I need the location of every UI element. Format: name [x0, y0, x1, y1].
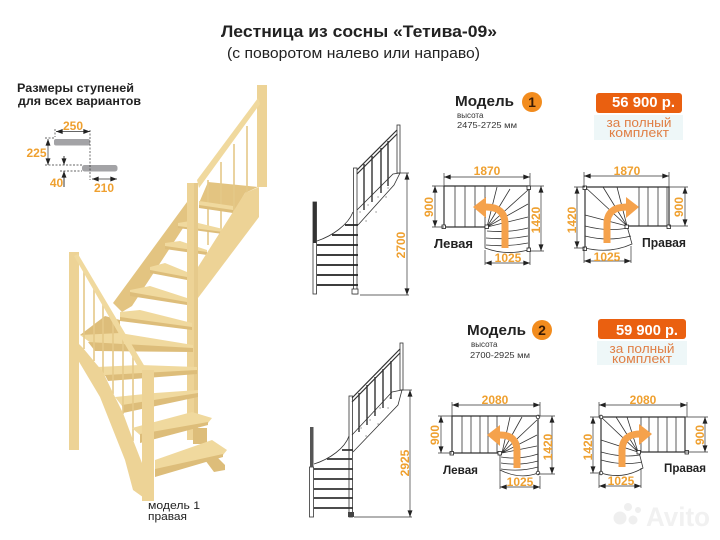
plan: model 1 left: 1420	[529, 206, 543, 233]
plan: model 1 right: 900	[672, 197, 686, 217]
watermark: Avito	[614, 502, 710, 532]
price: model 1: 56 900 р.	[612, 94, 675, 111]
label: Левая	[434, 237, 473, 251]
heading: model 2: Модель	[467, 322, 526, 339]
height note: model 1: высота	[457, 111, 484, 120]
middle post	[187, 183, 198, 440]
upper back wedge	[199, 182, 258, 213]
label: Левая	[443, 463, 478, 477]
diagram: step dimensions: 225	[26, 146, 47, 160]
heading: model 1: Модель	[455, 93, 514, 110]
illustration: wooden staircase	[69, 85, 267, 501]
upper stringer	[198, 187, 259, 298]
caption: model 1 right: правая	[148, 511, 187, 523]
title: Лестница из сосны «Тетива-09»	[221, 22, 497, 41]
side elevation: model 1	[313, 125, 409, 295]
plan: model 2 left	[428, 393, 555, 489]
plan: model 2 right	[581, 393, 708, 488]
plan: model 2 right: 1420	[581, 433, 595, 460]
plan: model 1 right: 1420	[565, 206, 579, 233]
plan: model 1 left: 1025	[495, 251, 522, 265]
heading: step sizes	[17, 81, 141, 108]
plan: model 2 right: 900	[693, 425, 707, 445]
plan: model 1 right: 1025	[594, 250, 621, 264]
arrow	[473, 197, 505, 248]
caption: model 1 right: модель 1	[148, 500, 200, 512]
plan: model 1 left: 900	[422, 197, 436, 217]
back beam	[113, 202, 187, 312]
side elevation: model 1: 2700	[394, 231, 408, 258]
title: (с поворотом налево или направо)	[227, 45, 480, 62]
upper post	[257, 85, 267, 187]
bottom treads	[132, 412, 212, 435]
plan: model 2 right: 1025	[608, 474, 635, 488]
price: model 2: комплект	[612, 352, 672, 366]
plan: model 2 left: 2080	[482, 393, 509, 407]
badge: 1: 1	[528, 94, 536, 110]
lower front post	[142, 370, 154, 501]
diagram: step dimensions	[26, 119, 118, 195]
badge: 2: 2	[538, 322, 546, 338]
label: Правая	[664, 461, 706, 475]
upper balusters	[208, 126, 247, 250]
plan: model 2 right: 2080	[630, 393, 657, 407]
side elevation: model 2: 2925	[398, 449, 412, 476]
winder treads	[80, 316, 120, 335]
lower handrail	[74, 254, 145, 372]
plan: model 2 left: 900	[428, 425, 442, 445]
price: model 2: 59 900 р.	[616, 322, 678, 339]
price: model 1	[594, 93, 683, 140]
diagram: step dimensions: 210	[94, 181, 114, 195]
plan: model 1 right: 1870	[614, 164, 641, 178]
height note: model 1	[457, 111, 517, 130]
height note: model 2: 2700-2925 мм	[470, 350, 530, 360]
plan: model 2 left: 1420	[541, 433, 555, 460]
caption: model 1 right	[148, 500, 200, 523]
height note: model 2	[470, 340, 530, 360]
plan: model 1 right	[565, 164, 688, 264]
lower stringer	[75, 340, 147, 500]
heading: step sizes: для всех вариантов	[18, 94, 141, 108]
plan: model 2 left: 1025	[507, 475, 534, 489]
arrow	[622, 424, 652, 467]
diagram: step dimensions: 250	[63, 119, 83, 133]
upper handrail	[197, 98, 260, 188]
plan: model 1 left	[422, 164, 544, 265]
title	[221, 22, 497, 62]
arrow	[487, 425, 517, 468]
upper treads	[199, 201, 233, 212]
price: model 1: комплект	[609, 126, 669, 140]
plan: model 1 left: 1870	[474, 164, 501, 178]
watermark: Avito: Avito	[646, 502, 710, 532]
lower balusters	[84, 268, 133, 441]
height note: model 2: высота	[471, 340, 498, 349]
price: model 1: за полный	[606, 116, 672, 130]
lower left post	[69, 252, 79, 450]
price: model 2	[597, 319, 687, 366]
heading: model 2	[467, 320, 552, 340]
label: Правая	[642, 236, 686, 250]
height note: model 1: 2475-2725 мм	[457, 120, 517, 130]
price: model 2: за полный	[610, 342, 675, 356]
arrow	[607, 197, 639, 243]
heading: model 1	[455, 92, 542, 112]
heading: step sizes: Размеры ступеней	[17, 81, 134, 95]
diagram: step dimensions: 40	[50, 176, 63, 190]
side elevation: model 2	[310, 343, 412, 517]
